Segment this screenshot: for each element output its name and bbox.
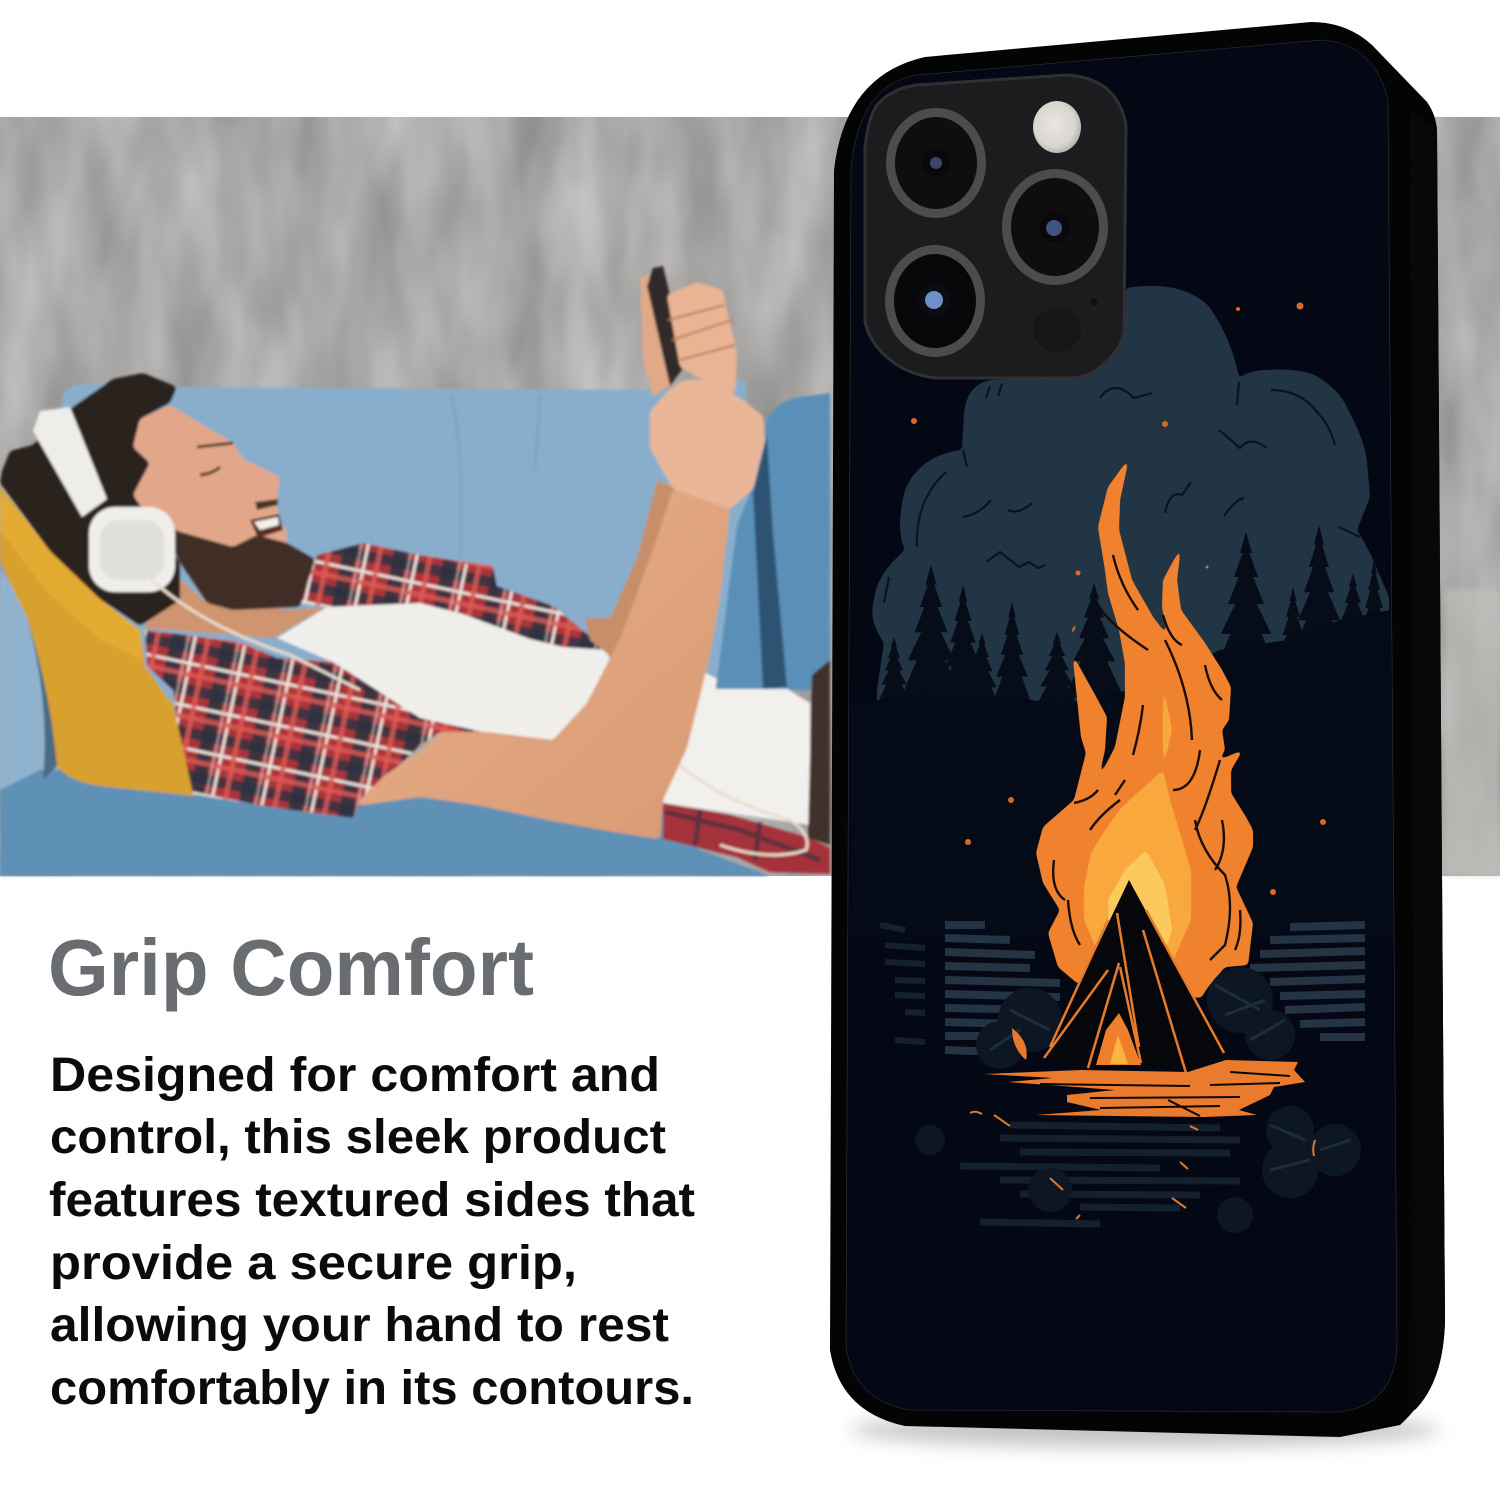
- white t-shirt chest: [277, 603, 620, 745]
- description text block: allowing your hand to rest: [50, 1299, 669, 1352]
- beard: [157, 515, 315, 610]
- white t-shirt lower: [650, 670, 810, 825]
- headphone band: [33, 407, 107, 517]
- fist: [650, 380, 765, 509]
- back forearm: [585, 481, 680, 660]
- artwork: tent: [1044, 880, 1224, 1073]
- camera module: [865, 75, 1126, 378]
- description text block: comfortably in its contours.: [50, 1362, 694, 1415]
- hair: [0, 373, 180, 626]
- background wall band: [0, 117, 1500, 876]
- lens: right: [1002, 169, 1108, 285]
- teeth: [254, 517, 279, 530]
- artwork: fire reflection: [984, 1028, 1305, 1117]
- jeans edge: [808, 660, 830, 845]
- artwork: sparks: [911, 302, 1326, 895]
- artwork: flames: [1036, 458, 1253, 998]
- tent poles: [1044, 910, 1224, 1073]
- thumb behind phone: [640, 274, 672, 396]
- plaid shirt hem: [663, 803, 830, 874]
- description text block: features textured sides that: [49, 1174, 695, 1227]
- flame core: [1108, 850, 1172, 965]
- headphone cup: [89, 507, 175, 592]
- facial features: [197, 443, 233, 475]
- phone case shadow: [850, 1413, 1440, 1447]
- tent doorway fire: [1096, 1013, 1141, 1065]
- neck: [143, 579, 327, 638]
- flame lines: [1053, 555, 1240, 960]
- artwork: lake reflections: [880, 925, 1365, 1224]
- sofa back cushion: [40, 380, 770, 700]
- sofa seat: [0, 770, 770, 876]
- lens: bottom left: [885, 245, 985, 357]
- inner flame: [1084, 683, 1191, 967]
- sofa arm dark seam: [753, 436, 787, 689]
- photo: man relaxing on sofa with phone: [0, 266, 830, 876]
- lens: top left: [886, 108, 986, 218]
- printed panel: [846, 40, 1397, 1412]
- case textured side: [1410, 110, 1445, 1410]
- case body: [830, 22, 1445, 1437]
- yellow pillow: [0, 487, 195, 796]
- title: Grip Comfort: [48, 923, 534, 1012]
- mouth: [250, 514, 283, 538]
- earphone cable: [150, 578, 807, 855]
- description text block: provide a secure grip,: [50, 1237, 577, 1290]
- front arm: [355, 489, 730, 839]
- moustache: [255, 499, 278, 510]
- small sensor: [1090, 298, 1098, 306]
- phone in hand: [647, 266, 684, 386]
- sofa left cushion: [0, 567, 47, 790]
- artwork: bushes: [915, 967, 1361, 1233]
- face: [133, 405, 287, 547]
- flash: [1033, 101, 1081, 153]
- phone case: [830, 22, 1445, 1437]
- artwork: forest silhouette: [851, 525, 1393, 940]
- outer flame: [1036, 458, 1253, 998]
- plaid shirt sleeve: [145, 630, 483, 818]
- fingers on phone: [667, 282, 737, 394]
- description text block: Designed for comfort and: [50, 1049, 660, 1102]
- plaid shirt collar and chest: [300, 543, 607, 650]
- description text block: control, this sleek product: [50, 1111, 666, 1164]
- description text block: [49, 1049, 695, 1415]
- artwork: cloud lines and birds: [884, 382, 1360, 603]
- microphone area: [1033, 308, 1081, 352]
- artwork: embers: [970, 1112, 1315, 1219]
- artwork: smoke cloud: [872, 286, 1389, 720]
- sofa arm: [717, 393, 830, 690]
